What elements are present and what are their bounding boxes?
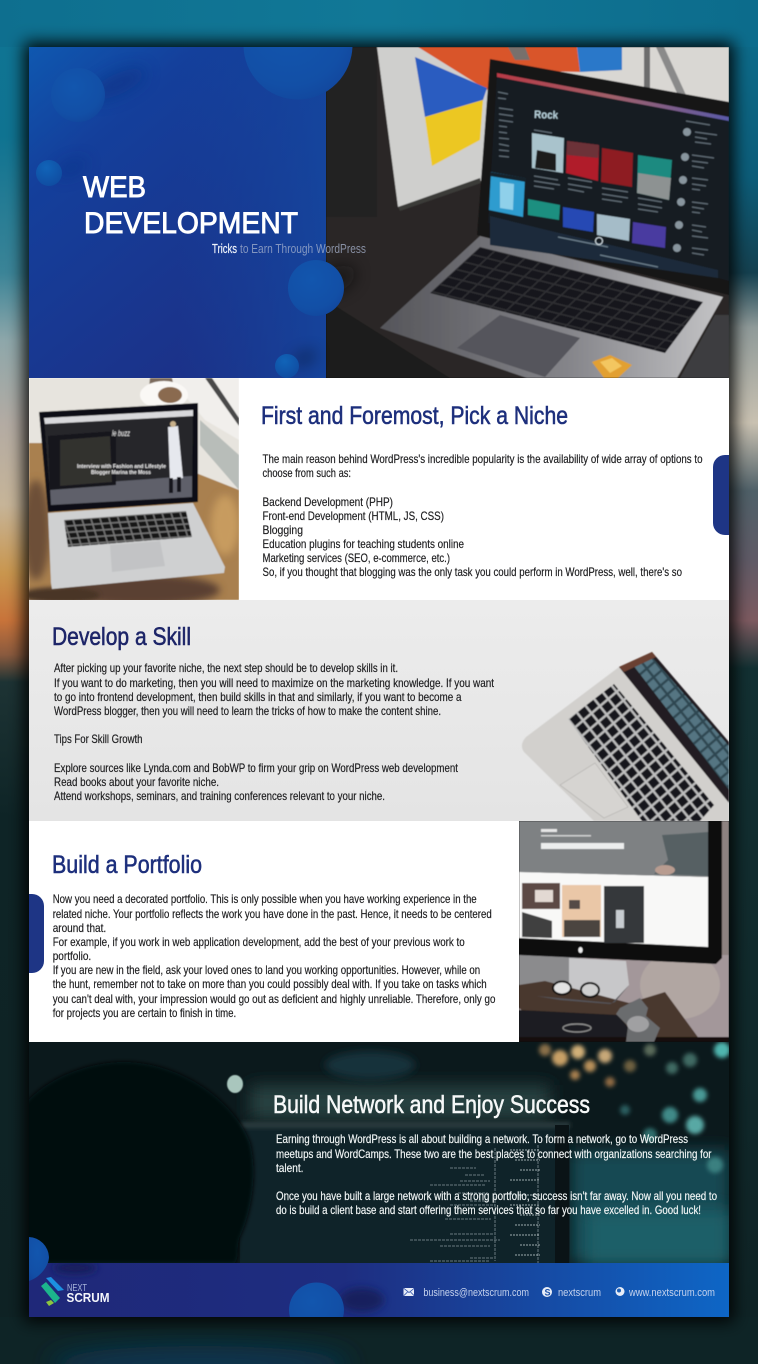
laptop screen — [619, 652, 729, 803]
title: DEVELOPMENT — [84, 207, 298, 240]
sphere: top — [244, 47, 352, 98]
blue hero block — [29, 47, 326, 378]
sphere: bottom — [275, 354, 299, 378]
body text: If you are new in the field, ask your loved ones to land you working opportunities. However, while on — [53, 963, 480, 977]
desk corner — [680, 315, 729, 378]
body text: Tips For Skill Growth — [54, 732, 142, 746]
sphere shadows — [101, 68, 356, 371]
heading: Build a Portfolio — [52, 851, 202, 879]
photo: laptop from above — [522, 652, 729, 821]
glasses — [553, 982, 599, 997]
photo: laptop on wood table: Interview with Fashion and Lifestyle — [77, 464, 166, 470]
body text: For example, if you work in web application development, add the best of your previous work to — [53, 935, 465, 949]
apple logo mark — [578, 947, 583, 953]
body text — [53, 892, 496, 1020]
body text: Marketing services (SEO, e-commerce, etc.) — [262, 551, 450, 565]
laptop base — [522, 665, 729, 821]
trackpad — [110, 541, 165, 572]
contact: skype: S — [544, 1288, 551, 1298]
body text: Front-end Development (HTML, JS, CSS) — [262, 509, 444, 523]
body text: WordPress blogger, then you will need to learn the tricks of how to make the content shine. — [54, 704, 441, 718]
panel: build network and enjoy success — [20, 1042, 730, 1265]
body text: Read books about your favorite niche. — [54, 775, 219, 789]
side tab left — [29, 894, 44, 973]
body text: talent. — [276, 1161, 304, 1175]
photo: laptop on wood table: le buzz — [112, 429, 130, 438]
body text: to go into frontend development, then build skills in that and similarly, if you want to become a — [54, 690, 462, 704]
contact: skype: nextscrum — [558, 1287, 601, 1299]
sidebar and friend list lines — [498, 92, 717, 255]
album tiles — [532, 133, 564, 173]
photo: developer at monitor — [20, 1042, 730, 1265]
body text — [54, 661, 495, 803]
bokeh foliage — [539, 1042, 730, 1173]
body text: you can't deal with, your impression would go out as deficient and highly unreliable. Therefore, only go — [53, 992, 496, 1006]
code lines on screen — [410, 1145, 538, 1263]
panel: first and foremost, pick a niche — [20, 378, 729, 606]
gray pouch — [616, 998, 660, 1042]
logo: SCRUM — [66, 1290, 110, 1305]
person silhouette — [20, 1062, 254, 1263]
body text: Blogging — [262, 523, 303, 537]
heading: First and Foremost, Pick a Niche — [261, 402, 568, 430]
sphere: right middle — [288, 260, 344, 316]
sphere: upper left — [64, 73, 105, 118]
title: WEB — [83, 171, 146, 204]
lid — [477, 59, 729, 295]
laptop lid — [39, 403, 198, 512]
subtitle: Tricks — [212, 241, 237, 256]
monitor — [519, 821, 722, 964]
wood shelf — [519, 981, 700, 1042]
footer — [29, 1237, 729, 1338]
body text — [276, 1132, 717, 1217]
trackpad — [560, 763, 628, 818]
laptop base — [380, 236, 723, 378]
body text: choose from such as: — [262, 466, 351, 480]
footer shadow and sphere — [53, 1262, 384, 1338]
body text: Education plugins for teaching students online — [262, 537, 464, 551]
logo: NEXT — [67, 1283, 87, 1294]
panel: build a portfolio — [29, 821, 729, 1042]
heading: Build Network and Enjoy Success — [273, 1091, 590, 1119]
body text: After picking up your favorite niche, the next step should be to develop skills in it. — [54, 661, 398, 675]
body text: If you want to do marketing, then you will need to maximize on the marketing knowledge. If you want — [54, 676, 495, 690]
body text: Explore sources like Lynda.com and BobWP to firm your grip on WordPress web development — [54, 761, 459, 775]
photo: desktop monitor — [519, 821, 729, 1042]
subtitle: to Earn Through WordPress — [240, 241, 366, 256]
monitor tiles — [522, 883, 560, 909]
contact: skype — [542, 1287, 601, 1299]
contact: email: business@nextscrum.com — [423, 1287, 529, 1299]
body text: related niche. Your portfolio reflects the work you have done in the past. Hence, it needs to be centered — [53, 907, 492, 921]
photo: laptop on wood table: Blogger Marina the Moss — [91, 470, 151, 476]
keyboard — [568, 684, 714, 821]
screen — [488, 73, 729, 281]
laptop base — [48, 503, 225, 589]
title — [82, 176, 298, 234]
body text: Backend Development (PHP) — [262, 495, 393, 509]
device on desk — [563, 1024, 591, 1032]
body text: around that. — [53, 921, 106, 935]
screen title: Rock — [534, 109, 559, 122]
sphere: small left — [36, 160, 62, 186]
contact: website: www.nextscrum.com — [628, 1287, 715, 1299]
gem sticker — [592, 355, 632, 378]
keyboard — [430, 247, 703, 353]
panel: develop a skill — [29, 600, 729, 821]
panel: hero — [29, 0, 729, 378]
hero photo: laptop on desk — [326, 47, 729, 378]
side tab right — [713, 455, 729, 535]
left edge sphere — [29, 1237, 49, 1281]
body text: Now you need a decorated portfolio. This is only possible when you have working experience in the — [53, 892, 477, 906]
body text: Attend workshops, seminars, and training conferences relevant to your niche. — [54, 789, 385, 803]
logo — [41, 1277, 110, 1306]
laptop screen — [44, 410, 193, 505]
stand — [569, 958, 629, 1003]
subtitle — [212, 243, 366, 256]
keyboard — [64, 511, 192, 547]
body text: the hunt, remember not to take on more than you could possibly deal with. If you take on tasks which — [53, 977, 487, 991]
body text — [262, 452, 703, 579]
photo: laptop on wood table — [20, 378, 239, 606]
heading: Develop a Skill — [52, 623, 191, 651]
body text: for projects you are certain to finish in time. — [53, 1006, 236, 1020]
trackpad — [457, 315, 580, 377]
body text: portfolio. — [53, 949, 91, 963]
